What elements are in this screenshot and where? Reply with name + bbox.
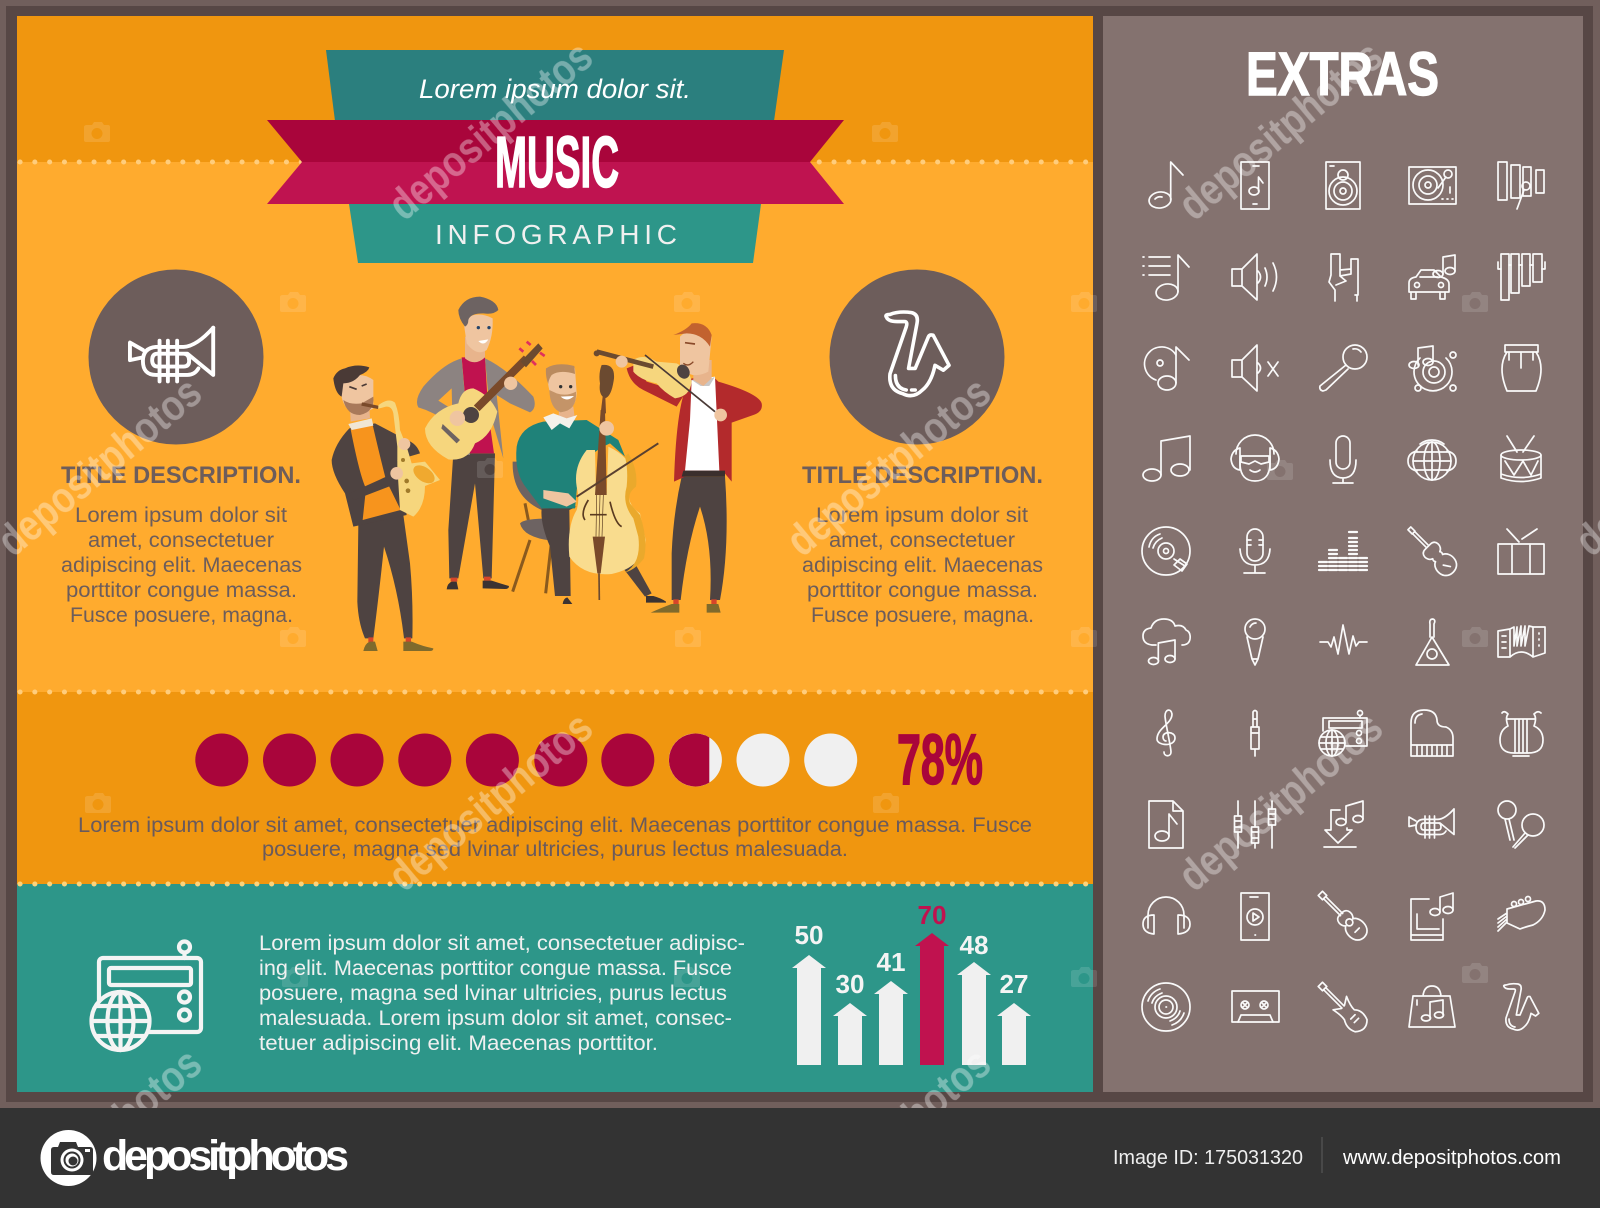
watermark: diagonal wordmarks: depositphotos [1169, 31, 1392, 230]
icon: two notes [1143, 436, 1190, 481]
chart: arrow bars: 41 [876, 947, 906, 977]
icon: radio globe [1319, 710, 1367, 756]
icon: marimba [1498, 254, 1545, 300]
icon: music shopping bag [1409, 986, 1455, 1027]
icon: conga drum [1502, 345, 1541, 391]
icon: subwoofer with note [1409, 346, 1456, 391]
icon: accordion [1498, 626, 1545, 657]
icon: radio with globe [92, 942, 201, 1050]
icon: vinyl disc [1142, 983, 1190, 1031]
icon: xylophone [1498, 162, 1544, 209]
icon: rock hand [1329, 254, 1358, 301]
text block: bottom paragraph [259, 932, 745, 1055]
title banner [267, 50, 844, 263]
icon: audio jack [1251, 710, 1259, 756]
text block: left description: adipiscing elit. Maecenas [61, 553, 302, 577]
icon: phone with note [1241, 162, 1269, 209]
icon: equalizer [1319, 532, 1367, 570]
percent value: 78% [897, 721, 983, 800]
text block: progress caption: Lorem ipsum dolor sit amet, consectetuer adipiscing elit. Maecenas porttitor congue massa. Fusce [78, 814, 1032, 837]
icon: music file [1149, 801, 1183, 848]
progress dots: 78 percent [195, 734, 857, 786]
text block: progress caption: posuere, magna sed lvinar ultricies, purus lectus malesuada. [262, 838, 848, 861]
icon: music note [1148, 162, 1183, 209]
icon: maracas [1498, 801, 1544, 848]
icon: treble clef [1157, 710, 1175, 756]
text block: right description: amet, consectetuer [829, 528, 1015, 552]
icon: car with notes [1409, 255, 1455, 299]
icon: cloud notes [1143, 619, 1190, 664]
icon: lyre [1500, 712, 1543, 756]
icon: phone play [1241, 893, 1269, 940]
icon: vinyl record arm [1142, 527, 1190, 575]
watermark: diagonal wordmarks: depositphotos [1169, 702, 1392, 901]
text block: bottom paragraph: tetuer adipiscing elit. Maecenas porttitor. [259, 1032, 658, 1055]
text block: left description [61, 462, 302, 627]
icon: balalaika [1416, 619, 1449, 665]
icon: microphone [1320, 345, 1367, 391]
musician: cellist [513, 364, 666, 604]
icon: trumpet circle [88, 270, 264, 444]
musician: guitarist [417, 297, 545, 589]
text block: left description: Fusce posuere, magna. [70, 603, 293, 627]
text block: right description: Fusce posuere, magna. [811, 603, 1034, 627]
chart: arrow bars: 48 [960, 930, 988, 960]
watermark: diagonal wordmarks: depositphotos [777, 367, 1000, 566]
illustration: band of four musicians [332, 297, 762, 651]
watermark: diagonal wordmarks: depositphotos [379, 702, 602, 901]
chart: arrow bars: 27 [1000, 969, 1028, 999]
icon: waveform [1320, 625, 1367, 654]
icon: turntable [1409, 167, 1456, 204]
musician: violinist [594, 323, 762, 613]
heading: extras: EXTRAS [1246, 40, 1439, 108]
icon: muted speaker [1232, 345, 1278, 391]
site url: www.depositphotos.com [1342, 1147, 1561, 1169]
icon: studio microphone [1330, 436, 1356, 483]
chart: arrow bars [792, 900, 1031, 1065]
icon: acoustic guitar [1313, 886, 1371, 944]
subtitle: Lorem ipsum dolor sit. [419, 74, 691, 104]
watermark: diagonal wordmarks: depositphotos [379, 31, 602, 230]
text block: right description: TITLE DESCRIPTION. [802, 462, 1043, 489]
icon: saxophone circle [830, 270, 1004, 444]
text block: bottom paragraph: posuere, magna sed lvinar ultricies, purus lectus [259, 982, 727, 1005]
icon: grand piano [1411, 710, 1453, 756]
icon: person with headphones [1231, 435, 1279, 481]
main title: MUSIC [495, 123, 619, 203]
text block: left description: TITLE DESCRIPTION. [61, 462, 301, 489]
text block: left description: amet, consectetuer [88, 528, 274, 552]
musician: saxophonist [332, 366, 440, 651]
text block: bottom paragraph: ing elit. Maecenas porttitor congue massa. Fusce [259, 957, 732, 980]
footer bar [0, 1108, 1600, 1208]
icon: book with notes [1411, 893, 1453, 940]
icon: snare drum [1501, 436, 1541, 482]
text block: right description: Lorem ipsum dolor sit [816, 503, 1028, 527]
icon: mixer sliders [1234, 801, 1276, 848]
icon: electric guitar [1313, 977, 1371, 1036]
text block: progress caption [78, 814, 1032, 861]
chart: arrow bars: 70 [918, 900, 946, 930]
watermark: camera stamps [84, 122, 1488, 987]
icon: speaker sound [1232, 254, 1276, 300]
icon: disc with note [1145, 347, 1189, 390]
icon: tom drum [1498, 529, 1544, 574]
text block: right description: adipiscing elit. Maecenas [802, 553, 1043, 577]
panel: main infographic [17, 16, 1093, 1092]
icon: vintage microphone [1240, 529, 1270, 573]
icon: playlist note [1143, 255, 1189, 301]
icon: violin [1402, 521, 1461, 580]
icon: cassette [1232, 991, 1279, 1022]
logo wordmark: depositphotos [102, 1132, 349, 1180]
text block: left description: Lorem ipsum dolor sit [75, 503, 287, 527]
text block: right description: porttitor congue massa. [807, 578, 1038, 602]
panel: extras [1103, 16, 1583, 1092]
icon: speaker [1326, 162, 1360, 209]
text block: bottom paragraph: Lorem ipsum dolor sit amet, consectetuer adipisc- [259, 932, 745, 955]
icon grid [1142, 162, 1545, 1036]
icon: saxophone [1504, 984, 1539, 1030]
text block: right description [802, 462, 1043, 627]
icon: globe headphones [1408, 440, 1456, 480]
icon: handheld microphone [1245, 619, 1265, 665]
icon: download notes [1324, 801, 1363, 847]
banner caption: INFOGRAPHIC [435, 219, 677, 250]
text block: left description: porttitor congue massa. [66, 578, 297, 602]
image id: Image ID: 175031320 [1113, 1147, 1303, 1169]
logo: camera badge [40, 1130, 96, 1186]
text block: bottom paragraph: malesuada. Lorem ipsum dolor sit amet, consec- [259, 1007, 732, 1030]
icon: trumpet [1409, 809, 1454, 838]
icon: bass headstock [1498, 896, 1545, 931]
icon: headphones [1143, 897, 1190, 934]
chart: arrow bars: 30 [836, 969, 864, 999]
chart: arrow bars: 50 [794, 920, 824, 950]
